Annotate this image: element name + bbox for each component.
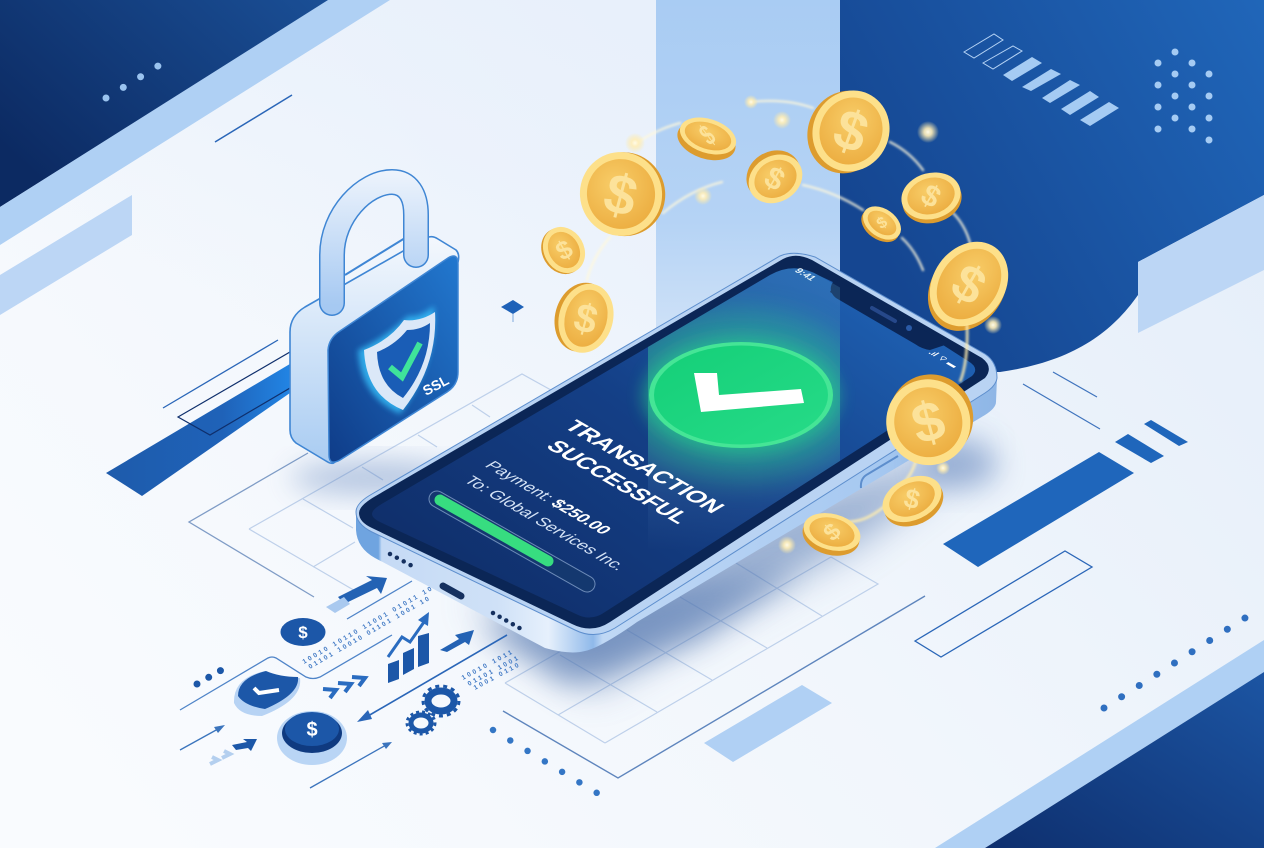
coin 12 [798, 507, 865, 562]
coin 8 [533, 219, 593, 282]
decoration: hatched stripes [964, 34, 1119, 126]
rim [356, 253, 997, 635]
screen [372, 268, 975, 618]
coin 11 [875, 467, 951, 536]
coin 8: $ [550, 233, 578, 267]
binary text: 01101 1001 [467, 655, 520, 688]
success circle [643, 338, 839, 454]
bezel [359, 256, 989, 629]
panel: translucent light column [656, 0, 840, 370]
coin 11: $ [901, 483, 923, 515]
coin 3 [794, 76, 903, 188]
notch [831, 279, 948, 350]
icon: dollar button [277, 711, 347, 765]
decoration: floor grid [249, 374, 878, 743]
coin 10: $ [905, 387, 951, 456]
icon: small arrows [180, 725, 392, 788]
lower-left fintech icons [180, 576, 520, 788]
coin 9 [547, 276, 621, 359]
icon: dots row [197, 664, 232, 684]
coin 5: $ [915, 178, 946, 215]
icon: dollar disk: $ [298, 623, 308, 642]
check mark [694, 373, 804, 412]
shadow [290, 462, 460, 494]
payment text: Payment: $250.00 [481, 458, 616, 537]
coins behind phone [533, 76, 1025, 359]
coin 6: $ [874, 214, 891, 233]
glow swoosh [845, 325, 967, 522]
lines [180, 581, 412, 710]
phone [356, 250, 997, 652]
coin 4: $ [759, 159, 791, 198]
payment text: To: Global Services Inc. [460, 473, 631, 573]
binary text [302, 585, 520, 692]
coin 3: $ [826, 96, 877, 165]
icon: shield [234, 671, 300, 716]
coin 2 [672, 111, 742, 167]
icon: long arrow [357, 635, 507, 722]
side button [861, 456, 898, 488]
shackle [332, 182, 416, 303]
binary text: 10010 10110 11001 01011 10 [302, 585, 433, 666]
panel: top-left navy corner [0, 0, 390, 315]
coin 12: $ [818, 518, 847, 547]
status time: 9:41 [791, 267, 819, 283]
panel: light block right [1138, 195, 1264, 333]
sparkles [694, 187, 712, 205]
coin 7 [911, 226, 1025, 346]
icon: right arrow [440, 630, 474, 652]
SSL label: SSL [420, 372, 452, 399]
binary text: 10010 1011 [461, 649, 514, 682]
speaker and port [390, 554, 523, 630]
progress bar [437, 499, 587, 584]
coin 10 [876, 365, 984, 475]
coin shadow [922, 441, 998, 489]
coins in front of phone [778, 325, 998, 562]
padlock [290, 182, 460, 494]
coin 5 [896, 166, 967, 230]
coin 2: $ [694, 120, 722, 152]
coin 6 [855, 199, 907, 249]
icon: dollar disk [280, 618, 326, 646]
coin 1 [571, 142, 675, 246]
coin 1: $ [598, 160, 644, 229]
body side [290, 237, 459, 463]
body wall [356, 253, 997, 652]
decoration: small diamond [501, 300, 524, 322]
camera [872, 308, 912, 331]
heading: SUCCESSFUL [541, 436, 696, 527]
icon: chevrons [323, 677, 365, 698]
decoration: left stripes and lines [106, 340, 300, 496]
coin 7: $ [941, 253, 996, 317]
icon: gears [407, 686, 459, 734]
status icons: .ıl ⌔ ▬ [926, 349, 961, 369]
decoration: right bars and lines [493, 372, 1245, 793]
column overlay on screen [648, 268, 840, 512]
decoration: floor outline [189, 453, 314, 597]
binary text: 01101 10010 01101 1001 10 [308, 595, 431, 671]
back edge [345, 238, 405, 275]
sparkles [778, 536, 796, 554]
heading: TRANSACTION [559, 416, 731, 517]
panel: bottom-right navy corner [935, 640, 1264, 848]
decoration: dot grid [1154, 48, 1212, 144]
coin 4 [737, 141, 811, 213]
icon: shield with check [358, 306, 435, 414]
panel: dark blue right block [840, 0, 1264, 372]
icon: top arrow [326, 576, 387, 613]
coin 9: $ [569, 295, 602, 343]
icon: rising bar chart [388, 612, 429, 683]
binary text: 1001 0110 [473, 662, 520, 692]
icon: dollar button: $ [306, 719, 318, 741]
light arcs [587, 101, 970, 280]
body face [328, 256, 458, 462]
phone shadow [470, 440, 990, 690]
